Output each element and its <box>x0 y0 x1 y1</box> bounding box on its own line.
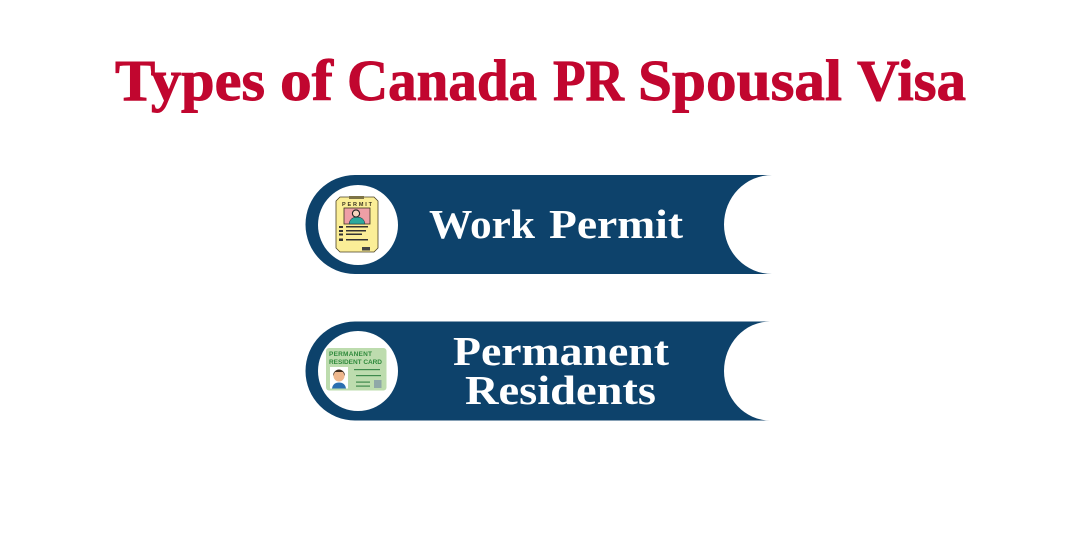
title: Visa <box>857 48 966 113</box>
title: Spousal <box>638 48 842 113</box>
icon: permanent resident card <box>318 331 398 411</box>
panel: permanent residents <box>306 322 770 420</box>
label: permanent residents <box>453 328 669 413</box>
panel: work permit <box>306 175 772 274</box>
title: Types <box>115 48 265 113</box>
label: permanent residents: Permanent <box>453 328 669 374</box>
label: work permit <box>429 201 683 247</box>
icon: permit card <box>318 185 398 265</box>
pill shape <box>306 175 772 274</box>
title <box>115 48 966 113</box>
title: Canada <box>347 48 537 113</box>
title: of <box>280 48 334 113</box>
label: work permit: Work <box>429 201 535 247</box>
pill shape <box>306 322 770 420</box>
label: work permit: Permit <box>549 201 683 247</box>
icon: permanent resident card: PERMANENT <box>329 351 372 358</box>
title: PR <box>553 48 625 113</box>
icon: permanent resident card: RESIDENT CARD <box>329 359 382 366</box>
icon: permit card: PERMIT <box>342 202 373 208</box>
label: permanent residents: Residents <box>465 367 656 413</box>
